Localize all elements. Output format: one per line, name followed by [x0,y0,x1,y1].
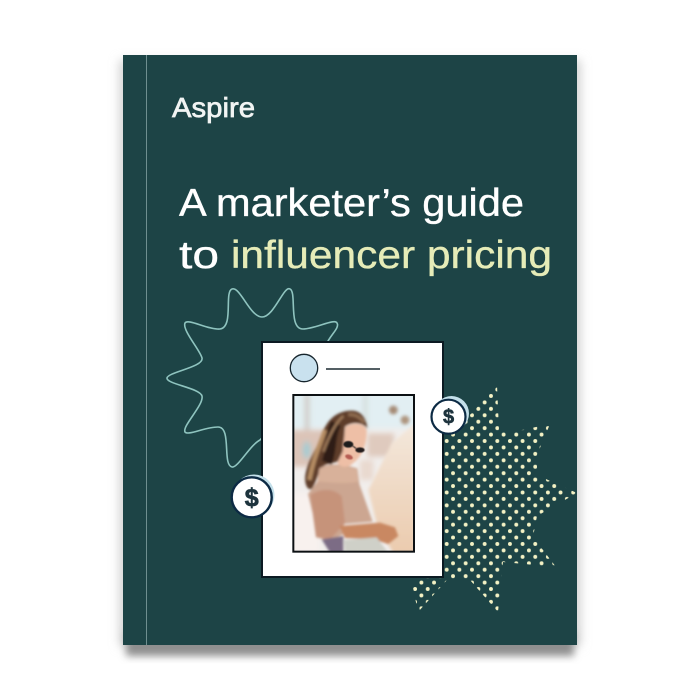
coin: bottom left: $ [245,484,259,512]
book cover [123,55,577,645]
coin: top right: $ [443,406,454,428]
lips [344,453,354,461]
squiggle star outline [167,289,338,467]
jeans [344,537,387,553]
face and neck [337,424,367,467]
coin: top right [432,396,469,434]
forearm [339,523,398,544]
sunglasses [343,441,365,453]
title: influencer pricing [231,234,552,277]
blouse [308,464,373,541]
book shadow [119,60,581,656]
title: A marketer’s guide [179,182,524,225]
title [179,182,552,277]
photo: woman in sunglasses [290,392,417,553]
avatar [290,354,318,382]
post card [262,342,443,577]
hair [305,411,367,489]
dotted star [413,385,577,612]
coin: bottom left [232,474,274,517]
spine line [146,55,148,645]
title: to [179,234,219,277]
name line [326,368,380,370]
logo: Aspire: Aspire [172,92,255,123]
